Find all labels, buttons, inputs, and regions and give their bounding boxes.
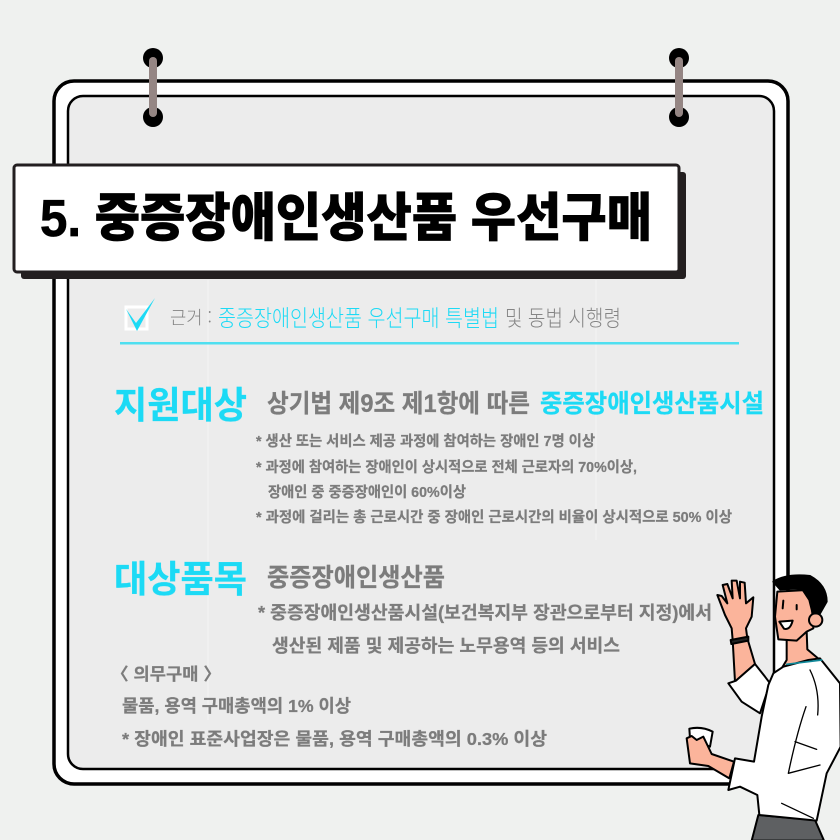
- title: 5. 중증장애인생산품 우선구매: [40, 190, 652, 248]
- rolled sleeve: [728, 664, 770, 713]
- support target criteria: * 생산 또는 서비스 제공 과정에 참여하는 장애인 7명 이상: [256, 433, 595, 450]
- legal basis line: 근거 :: [170, 304, 212, 330]
- icon: left ring hanger: [143, 48, 163, 127]
- raised arm and hand: [717, 581, 755, 682]
- support target criteria: * 과정에 걸리는 총 근로시간 중 장애인 근로시간의 비율이 상시적으로 50% 이상: [256, 509, 732, 526]
- cup: [689, 728, 713, 747]
- title banner: [14, 165, 686, 279]
- target products detail: * 중증장애인생산품시설(보건복지부 장관으로부터 지정)에서: [258, 603, 712, 623]
- lanyard: [787, 660, 822, 664]
- target products detail: [258, 603, 712, 656]
- face: [775, 590, 813, 641]
- support target criteria: 장애인 중 중증장애인이 60%이상: [268, 484, 466, 501]
- divider line: [120, 342, 739, 344]
- support target description: 상기법 제9조 제1항에 따른: [267, 390, 530, 418]
- legal basis line: 및 동법 시행령: [505, 301, 621, 333]
- section heading: target products: 대상품목: [114, 559, 247, 600]
- target products description: 중증장애인생산품: [267, 564, 445, 592]
- wristband: [731, 637, 748, 644]
- icon: right ring hanger: [669, 48, 689, 127]
- trousers: [752, 815, 824, 840]
- neck: [782, 632, 820, 668]
- mandatory purchase block: [111, 665, 547, 749]
- mandatory purchase block: 〈 의무구매 〉: [111, 665, 221, 684]
- ear: [809, 613, 822, 627]
- shirt: [728, 658, 840, 821]
- lower hand and forearm: [687, 736, 734, 778]
- support target description: 중증장애인생산품시설: [540, 390, 764, 418]
- mandatory purchase block: * 장애인 표준사업장은 물품, 용역 구매총액의 0.3% 이상: [122, 729, 547, 749]
- eyes and mouth: [783, 601, 797, 609]
- icon: check mark: [126, 298, 155, 331]
- hair: [773, 575, 827, 613]
- target products detail: 생산된 제품 및 제공하는 노무용역 등의 서비스: [272, 636, 620, 656]
- support target description: [267, 390, 764, 418]
- legal basis line: 중증장애인생산품 우선구매 특별법: [218, 299, 499, 333]
- support target criteria: [256, 433, 732, 526]
- panel: notice board frame: [54, 81, 788, 784]
- section heading: support target: 지원대상: [114, 385, 247, 426]
- support target criteria: * 과정에 참여하는 장애인이 상시적으로 전체 근로자의 70%이상,: [256, 459, 637, 476]
- illustration: waving man: [687, 575, 840, 840]
- mandatory purchase block: 물품, 용역 구매총액의 1% 이상: [122, 696, 351, 716]
